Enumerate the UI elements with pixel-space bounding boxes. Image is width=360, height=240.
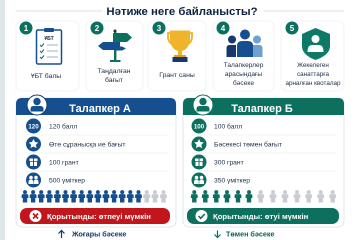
label: Грант саны	[159, 72, 195, 79]
header B: Талапкер Б	[231, 103, 293, 115]
pictogram B	[191, 190, 336, 202]
icon: clipboard: ҰБТ	[44, 36, 54, 42]
header A: Талапкер А	[69, 103, 131, 115]
card 5: quotas: арналған квоталар	[285, 80, 341, 87]
label: Таңдалған	[97, 68, 131, 75]
card 5: quotas	[281, 21, 344, 91]
row: grants	[192, 154, 244, 170]
row: score: 120 балл	[49, 122, 77, 130]
row: applicants	[192, 172, 250, 188]
card 1: score	[16, 21, 79, 91]
row: grants: 100 грант	[49, 159, 79, 166]
row: grants: 300 грант	[214, 159, 244, 166]
card 2: direction: бағыт	[105, 76, 123, 84]
row: score: 120	[28, 123, 39, 130]
label: Талапкерлер	[224, 62, 264, 69]
row: direction: Бәсекесі төмен бағыт	[214, 140, 282, 148]
title: Нәтиже неге байланысты?	[106, 6, 258, 18]
row: applicants	[26, 172, 85, 188]
row: grants	[26, 154, 79, 170]
header A	[16, 98, 176, 115]
result B	[187, 208, 339, 224]
badge 3: 3	[157, 24, 162, 33]
row: score	[192, 118, 242, 134]
row: score	[26, 118, 77, 134]
card 2: direction	[86, 21, 143, 91]
row: direction	[192, 136, 282, 152]
icon: people group	[226, 30, 262, 57]
row: score: 100 балл	[214, 122, 242, 130]
result A	[20, 208, 170, 224]
card 4: competition	[213, 21, 274, 91]
panel: applicant B	[183, 95, 344, 227]
badge 4: 4	[221, 24, 226, 33]
result A: Қорытынды: өтпеуі мүмкін	[47, 212, 151, 221]
card 5: quotas: санаттарға	[297, 71, 329, 78]
avatar A	[27, 95, 47, 115]
icon: shield	[302, 28, 330, 60]
pictogram A	[22, 190, 167, 202]
avatar B	[193, 95, 213, 115]
left page edge	[0, 0, 5, 240]
label: ҰБТ балы	[31, 72, 61, 80]
row: direction: Өте сұранысқа ие бағыт	[49, 140, 126, 148]
header B	[183, 98, 344, 115]
footer A: higher competition: Жоғары бәсеке	[71, 230, 126, 238]
footer B: lower competition: Төмен бәсеке	[226, 230, 274, 238]
row: applicants: 500 үміткер	[49, 176, 85, 184]
row: score: 100	[194, 123, 205, 130]
result B: Қорытынды: өтуі мүмкін	[213, 212, 309, 221]
icon: signpost	[98, 30, 132, 62]
badge 5: 5	[290, 24, 295, 33]
row: direction	[26, 136, 126, 152]
label: Жекелеген	[297, 62, 329, 69]
badge 2: 2	[95, 24, 100, 33]
card 4: competition: арасындағы	[225, 71, 262, 78]
row: applicants: 350 үміткер	[214, 176, 250, 184]
card 3: grants	[148, 21, 206, 91]
badge 1: 1	[24, 24, 29, 33]
panel: applicant A	[16, 95, 176, 227]
icon: trophy	[168, 30, 192, 62]
card 4: competition: бәсеке	[233, 79, 254, 87]
